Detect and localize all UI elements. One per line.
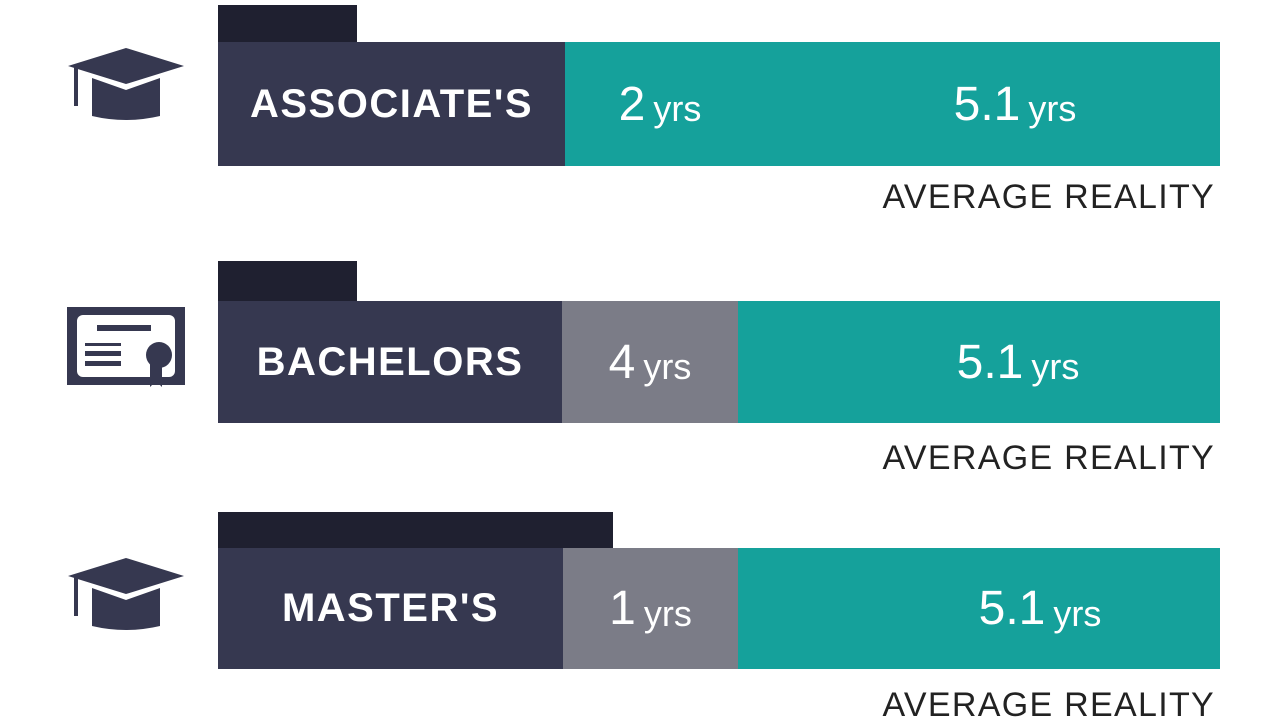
label: ASSOCIATE'S: [218, 42, 565, 166]
tab: [218, 512, 613, 548]
bar: gray expected 4 yrs: [562, 301, 738, 423]
icon: graduation cap 1: [68, 48, 184, 120]
value: 2 yrs: yrs: [653, 88, 701, 129]
bar: teal 5.1 yrs: [738, 301, 1220, 423]
value: 5.1 yrs: yrs: [1028, 88, 1076, 129]
bar: gray 1 yrs: 1: [609, 582, 636, 635]
label: BACHELORS: BACHELORS: [257, 340, 523, 384]
bar: gray expected 4 yrs: yrs: [643, 346, 691, 387]
row: associate's: [218, 5, 1220, 166]
value: 5.1 yrs: [979, 582, 1101, 635]
caption: average reality 3: AVERAGE REALITY: [882, 686, 1215, 724]
caption: average reality 1: AVERAGE REALITY: [882, 178, 1215, 216]
tab: [218, 261, 357, 301]
bar: gray expected 4 yrs: 4: [609, 336, 635, 388]
bar: gray 1 yrs: [563, 548, 738, 669]
label: MASTER'S: MASTER'S: [282, 586, 499, 630]
row: master's: [218, 512, 1220, 669]
value: 2 yrs: 2: [619, 78, 645, 130]
value: 5.1 yrs: 5.1: [979, 582, 1045, 635]
bar: gray 1 yrs: yrs: [644, 592, 692, 634]
label: BACHELORS: [218, 301, 562, 423]
tab: [218, 5, 357, 43]
label: MASTER'S: [218, 548, 563, 669]
value: 2 yrs: [619, 78, 701, 130]
value: 5.1 yrs: yrs: [1053, 592, 1101, 634]
value: 5.1 yrs: yrs: [1031, 346, 1079, 387]
row: bachelors: [218, 261, 1220, 423]
bar: teal reality: [565, 42, 1220, 166]
bar: teal 5.1 yrs: [738, 548, 1220, 669]
caption: average reality 2: AVERAGE REALITY: [882, 439, 1215, 477]
value: 5.1 yrs: 5.1: [957, 336, 1023, 388]
label: ASSOCIATE'S: ASSOCIATE'S: [250, 82, 533, 126]
value: 5.1 yrs: 5.1: [954, 78, 1020, 130]
value: 5.1 yrs: [957, 336, 1079, 388]
value: 5.1 yrs: [954, 78, 1076, 130]
icon: diploma certificate: [67, 307, 185, 387]
icon: graduation cap 2: [68, 558, 184, 630]
